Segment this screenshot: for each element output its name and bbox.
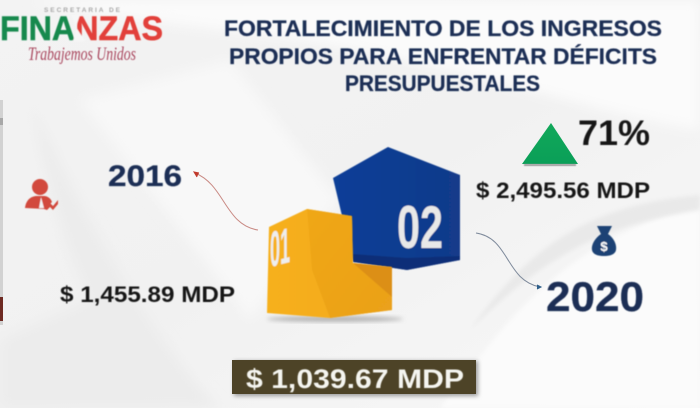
cube 02 blue (333, 147, 460, 270)
title: PRESUPUESTALES (345, 71, 540, 96)
icon: money bag (592, 226, 616, 256)
amount 2016: $ 1,455.89 MDP (60, 282, 235, 307)
cube shadow (267, 316, 403, 322)
year 2020: 2020 (546, 273, 644, 320)
logo wordmark: FINANZAS (0, 10, 163, 48)
triangle up indicator (522, 123, 578, 166)
arrow: 2016 to cube 01 (194, 172, 258, 230)
year 2016: 2016 (108, 160, 182, 193)
cube 01 yellow (267, 209, 392, 318)
icon: person with chart (25, 179, 58, 210)
logo overline text: SECRETARIA DE (44, 7, 121, 14)
cube 01 yellow: 01 (270, 217, 290, 278)
difference amount box (232, 360, 478, 396)
logo: Secretaría de Finanzas (0, 7, 163, 65)
amount 2020: $ 2,495.56 MDP (476, 178, 650, 203)
percentage 71%: 71% (578, 114, 650, 153)
difference amount box: $ 1,039.67 MDP (246, 364, 464, 394)
logo tagline: Trabajemos Unidos (28, 44, 136, 65)
title: FORTALECIMIENTO DE LOS INGRESOS (224, 16, 662, 41)
cube number 02: 02 (397, 194, 443, 261)
title: PROPIOS PARA ENFRENTAR DÉFICITS (229, 44, 657, 69)
title (224, 16, 662, 96)
arrow: cube 02 to 2020 (476, 233, 541, 289)
icon: money bag: $ (600, 239, 608, 254)
logo emblem (71, 15, 85, 41)
